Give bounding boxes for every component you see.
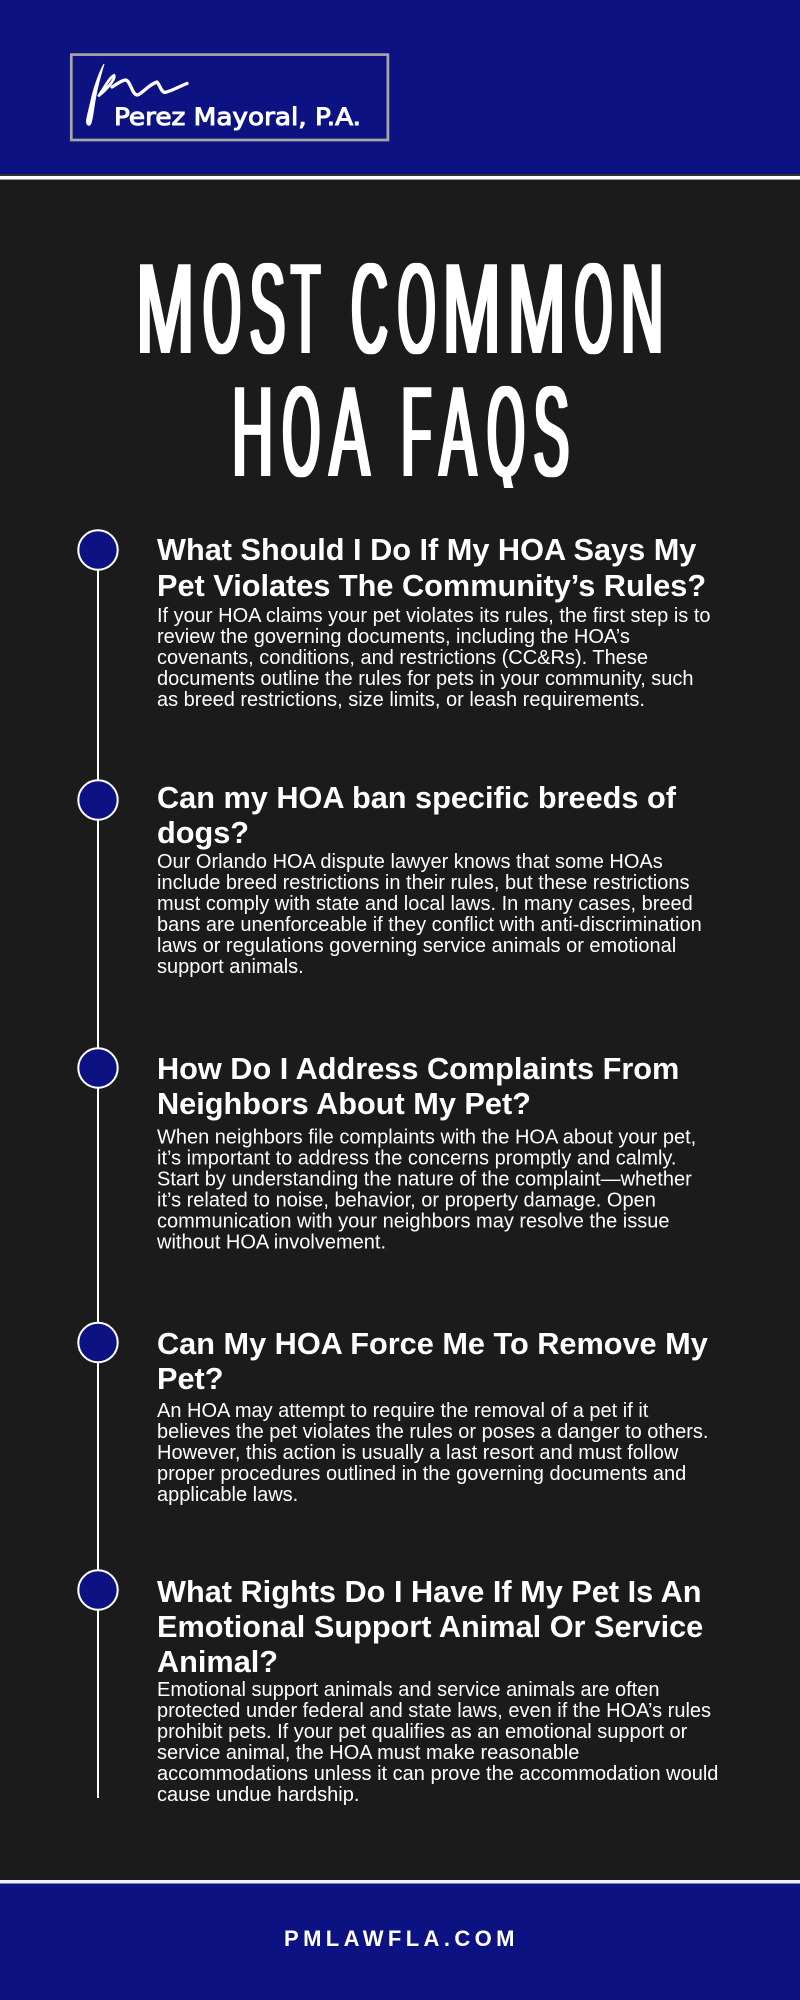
faq 1 body: [157, 605, 711, 711]
faq 4 body: An HOA may attempt to require the removal of a pet if it: [157, 1400, 649, 1422]
faq 1: [157, 532, 711, 711]
faq 2: [157, 780, 702, 978]
company name: Perez Mayoral, P.A.: [114, 102, 361, 131]
title: Q: [487, 360, 525, 504]
faq 2 heading: [157, 780, 677, 850]
faq 3 heading: [157, 1051, 679, 1121]
faq 2 body: laws or regulations governing service animals or emotional: [157, 935, 676, 957]
timeline node 1: [78, 530, 118, 570]
faq 3 body: without HOA involvement.: [156, 1232, 386, 1254]
faq 5 body: prohibit pets. If your pet qualifies as an emotional support or: [157, 1721, 688, 1743]
faq 5 body: cause undue hardship.: [157, 1784, 359, 1806]
faq 4 body: However, this action is usually a last resort and must follow: [157, 1442, 679, 1464]
faq 2 body: include breed restrictions in their rules, but these restrictions: [157, 872, 689, 894]
faq 4 heading: [157, 1326, 708, 1396]
title: O: [203, 237, 241, 381]
faq 4: [157, 1326, 708, 1506]
faq 1 body: as breed restrictions, size limits, or leash requirements.: [157, 689, 645, 711]
faq 1 body: documents outline the rules for pets in your community, such: [157, 668, 694, 690]
faq 3 heading: How Do I Address Complaints From: [157, 1051, 679, 1086]
faq 2 body: support animals.: [157, 956, 304, 978]
faq 5: [157, 1574, 718, 1806]
faq 5 body: Emotional support animals and service animals are often: [157, 1679, 659, 1701]
faq 3 body: When neighbors file complaints with the HOA about your pet,: [157, 1126, 696, 1148]
faq 3 body: [156, 1126, 696, 1254]
faq 2 body: must comply with state and local laws. In many cases, breed: [157, 893, 693, 915]
title: M: [136, 237, 194, 381]
faq 5 heading: Emotional Support Animal Or Service: [157, 1609, 703, 1644]
faq 4 body: proper procedures outlined in the governing documents and: [157, 1463, 686, 1485]
faq 1 heading: What Should I Do If My HOA Says My: [157, 532, 696, 567]
faq 3 body: it’s related to noise, behavior, or property damage. Open: [157, 1190, 656, 1212]
faq 1 body: covenants, conditions, and restrictions (CC&Rs). These: [157, 647, 648, 669]
footer band: [0, 1880, 800, 2000]
title: H: [232, 360, 273, 504]
faq 2 heading: dogs?: [157, 815, 249, 850]
faq 2 heading: Can my HOA ban specific breeds of: [157, 780, 677, 815]
faq 3 body: Start by understanding the nature of the complaint—whether: [157, 1168, 692, 1190]
faq 5 heading: [157, 1574, 703, 1679]
title: O: [398, 237, 435, 381]
faq 1 heading: [157, 532, 706, 603]
timeline node 3: [78, 1048, 118, 1088]
faq 4 heading: Can My HOA Force Me To Remove My: [157, 1326, 708, 1361]
timeline node 4: [78, 1323, 118, 1362]
title: M: [443, 237, 501, 381]
title: O: [283, 360, 320, 504]
faq 3 heading: Neighbors About My Pet?: [157, 1086, 531, 1121]
timeline: [78, 530, 118, 1798]
icon: signature: [86, 64, 187, 125]
faq 5 heading: Animal?: [157, 1644, 278, 1679]
faq 5 body: service animal, the HOA must make reasonable: [157, 1742, 579, 1764]
title: [136, 237, 664, 504]
faq 2 body: Our Orlando HOA dispute lawyer knows that some HOAs: [157, 851, 663, 873]
faq 3: [156, 1051, 696, 1254]
header band: [0, 0, 800, 180]
faq 4 body: [157, 1400, 708, 1506]
faq 5 body: accommodations unless it can prove the accommodation would: [157, 1763, 718, 1785]
faq 5 body: [157, 1679, 718, 1806]
faq 4 body: believes the pet violates the rules or poses a danger to others.: [157, 1421, 708, 1443]
title: O: [575, 237, 612, 381]
title: A: [440, 360, 476, 504]
title: S: [250, 237, 285, 381]
faq 4 body: applicable laws.: [157, 1484, 298, 1506]
faq 1 heading: Pet Violates The Community’s Rules?: [157, 568, 706, 603]
faq 2 body: bans are unenforceable if they conflict with anti-discrimination: [157, 914, 702, 936]
title: T: [291, 237, 319, 381]
faq 4 heading: Pet?: [157, 1361, 224, 1396]
title: F: [402, 360, 431, 504]
faq 1 body: review the governing documents, including the HOA’s: [157, 626, 630, 648]
faq 2 body: [157, 851, 702, 978]
faq 3 body: communication with your neighbors may resolve the issue: [157, 1210, 669, 1232]
faq 5 heading: What Rights Do I Have If My Pet Is An: [157, 1574, 701, 1609]
logo: [71, 55, 388, 140]
text: N: [621, 237, 664, 381]
website url: PMLAWFLA.COM: [284, 1926, 519, 1951]
faq 3 body: it’s important to address the concerns promptly and calmly.: [157, 1148, 676, 1170]
title: S: [534, 360, 569, 504]
timeline node 5: [78, 1570, 118, 1610]
title: M: [508, 237, 566, 381]
timeline node 2: [78, 780, 118, 820]
title: A: [330, 360, 369, 504]
faq 1 body: If your HOA claims your pet violates its rules, the first step is to: [157, 605, 711, 627]
faq 5 body: protected under federal and state laws, even if the HOA’s rules: [157, 1700, 711, 1722]
title: C: [351, 237, 388, 381]
